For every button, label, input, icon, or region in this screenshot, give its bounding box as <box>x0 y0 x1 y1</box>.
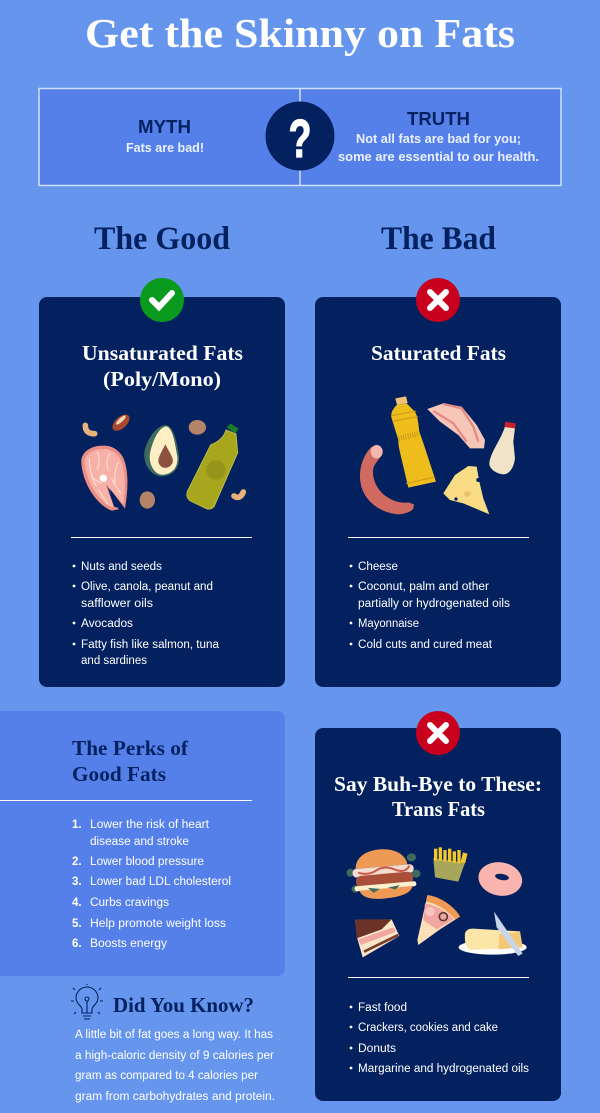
list: trans fat sources: Fast food <box>358 1002 407 1014</box>
list: good fat sources: and sardines <box>81 655 147 667</box>
callout body: gram as compared to 4 calories per <box>75 1070 258 1082</box>
card heading <box>82 341 243 391</box>
truth text: some are essential to our health. <box>338 150 539 164</box>
illustration: trans fat foods <box>345 846 527 957</box>
heading: the bad: The Bad <box>381 221 496 257</box>
numbered list: perks: 3. <box>72 876 82 888</box>
list: good fat sources: Nuts and seeds <box>81 561 162 573</box>
list: trans fat sources <box>350 1002 529 1075</box>
icon: question mark <box>266 102 334 170</box>
illustration: saturated fat foods <box>360 396 516 514</box>
myth text <box>126 117 204 155</box>
panel: trans fats <box>315 711 561 1101</box>
perks heading <box>72 736 189 786</box>
panel: unsaturated fats <box>39 278 285 687</box>
list: trans fat sources: Donuts <box>358 1043 396 1055</box>
list: good fat sources <box>73 561 220 667</box>
numbered list: perks: 5. <box>72 918 82 930</box>
panel: perks of good fats <box>0 711 285 976</box>
myth text: MYTH <box>138 117 191 137</box>
numbered list: perks <box>72 819 231 950</box>
icon: red x <box>416 711 460 755</box>
card heading: Trans Fats <box>392 797 485 821</box>
card heading: Say Buh-Bye to These: <box>334 772 542 796</box>
truth text <box>338 109 539 164</box>
list: saturated fat sources: Coconut, palm and other <box>358 581 489 593</box>
perks heading: The Perks of <box>72 736 189 760</box>
list: saturated fat sources <box>350 561 510 651</box>
list: trans fat sources: Crackers, cookies and cake <box>358 1022 498 1034</box>
numbered list: perks: 4. <box>72 897 82 909</box>
list: good fat sources: Olive, canola, peanut and <box>81 581 213 593</box>
numbered list: perks: Boosts energy <box>90 938 167 950</box>
list: good fat sources: safflower oils <box>81 598 153 610</box>
list: saturated fat sources: Mayonnaise <box>358 618 419 630</box>
numbered list: perks: 1. <box>72 819 82 831</box>
list: saturated fat sources: Cheese <box>358 561 398 573</box>
perks heading: Good Fats <box>72 762 166 786</box>
card heading: Saturated Fats <box>371 341 506 365</box>
icon: light bulb <box>71 984 103 1019</box>
icon: question mark: ? <box>288 109 312 169</box>
card heading: (Poly/Mono) <box>103 367 221 391</box>
callout body: gram from carbohydrates and protein. <box>75 1091 275 1103</box>
list: good fat sources: Fatty fish like salmon, tuna <box>81 639 220 651</box>
callout body: A little bit of fat goes a long way. It has <box>75 1029 273 1041</box>
numbered list: perks: Curbs cravings <box>90 897 169 909</box>
icon: red x <box>416 278 460 322</box>
list: saturated fat sources: Cold cuts and cured meat <box>358 639 493 651</box>
list: saturated fat sources: partially or hydrogenated oils <box>358 598 510 610</box>
card heading: Unsaturated Fats <box>82 341 243 365</box>
list: good fat sources: Avocados <box>81 618 133 630</box>
numbered list: perks: 6. <box>72 938 82 950</box>
callout heading: Did You Know? <box>113 993 254 1017</box>
numbered list: perks: Lower bad LDL cholesterol <box>90 876 231 888</box>
title: Get the Skinny on Fats <box>85 10 515 56</box>
numbered list: perks: 2. <box>72 856 82 868</box>
callout body: a high-caloric density of 9 calories per <box>75 1050 274 1062</box>
divider <box>348 976 529 978</box>
numbered list: perks: disease and stroke <box>90 836 189 848</box>
icon: green check <box>140 278 184 322</box>
card heading <box>334 772 542 821</box>
heading: the good: The Good <box>94 221 230 257</box>
illustration: good fat foods <box>81 412 243 511</box>
myth text: Fats are bad! <box>126 141 204 155</box>
list: trans fat sources: Margarine and hydrogenated oils <box>358 1063 529 1075</box>
truth text: Not all fats are bad for you; <box>356 132 521 146</box>
callout body <box>75 1029 275 1103</box>
numbered list: perks: Help promote weight loss <box>90 918 226 930</box>
numbered list: perks: Lower the risk of heart <box>90 819 210 831</box>
panel: saturated fats <box>315 278 561 687</box>
truth text: TRUTH <box>407 109 470 129</box>
divider <box>348 536 529 538</box>
divider <box>71 536 252 538</box>
callout: did you know <box>71 984 275 1103</box>
numbered list: perks: Lower blood pressure <box>90 856 204 868</box>
panel: myth and truth <box>39 88 561 186</box>
